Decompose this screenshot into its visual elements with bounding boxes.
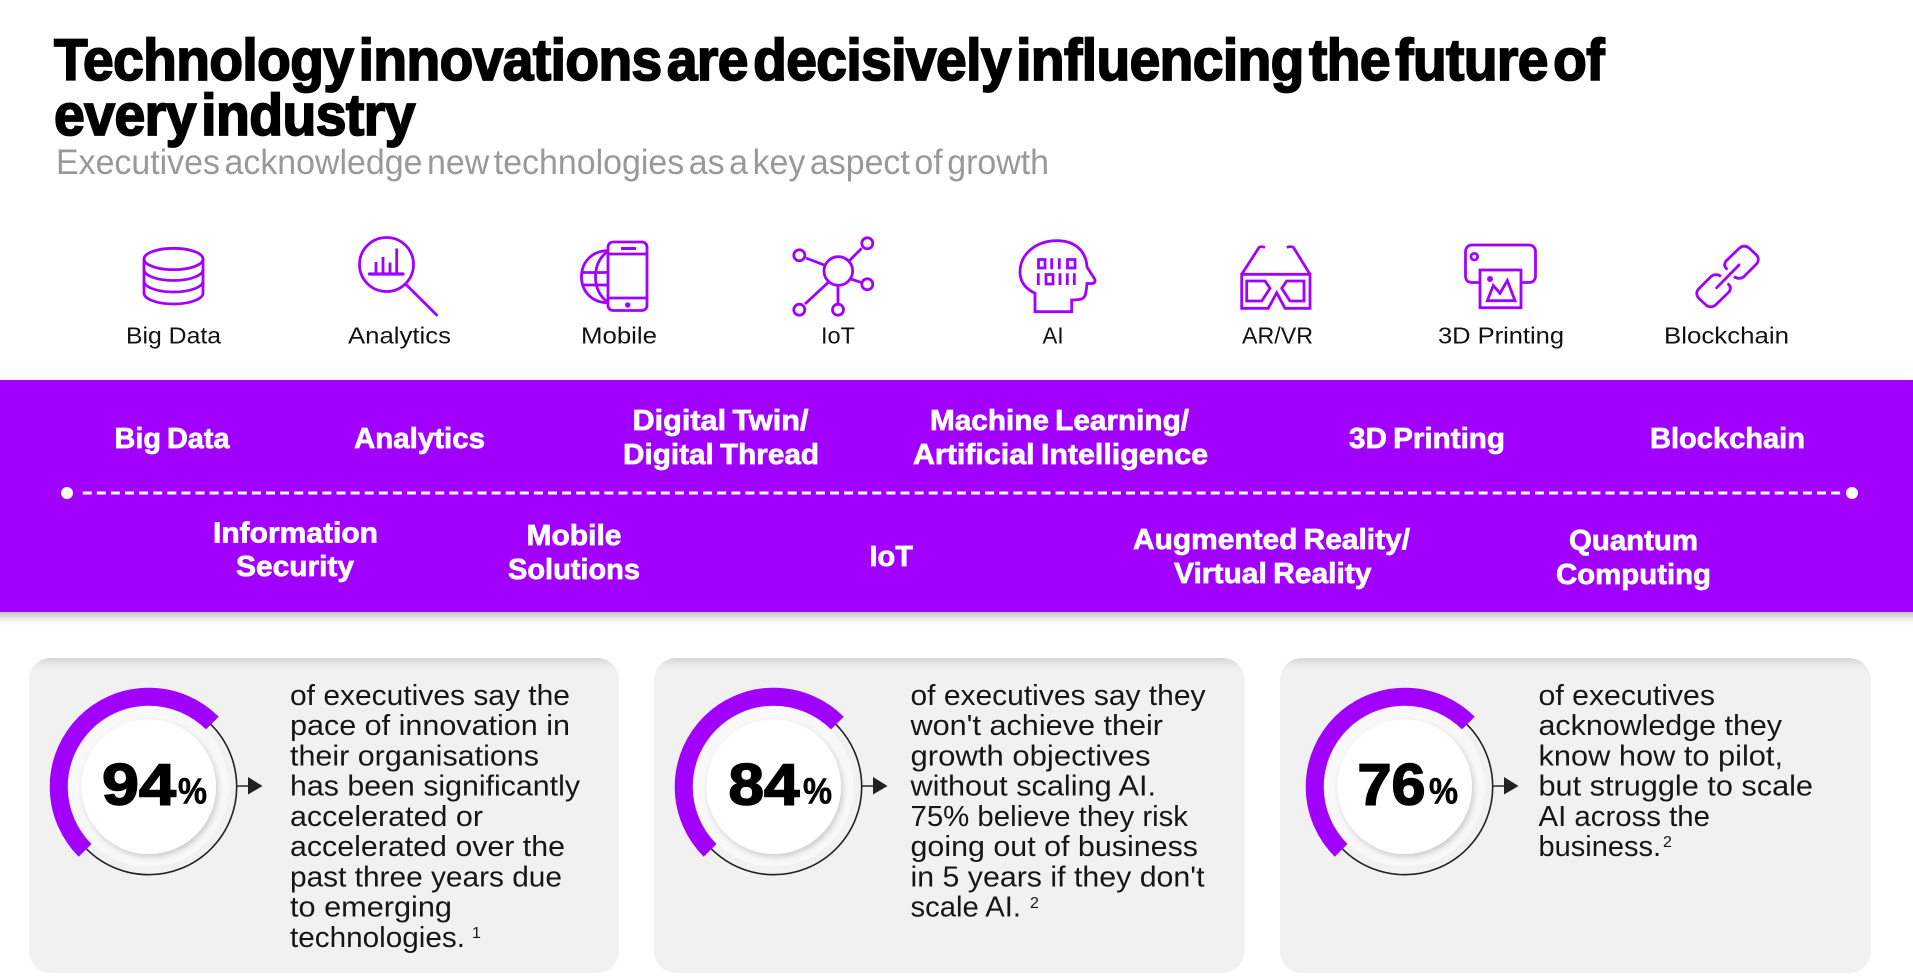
text block 76% (1538, 680, 1813, 863)
band label: Quantum Computing: Computing (1556, 559, 1711, 591)
icon: 3D printer (1466, 245, 1536, 308)
text block 84%: going out of business (910, 831, 1198, 863)
donut chart 76% (1315, 697, 1493, 875)
title: every industry (54, 83, 415, 148)
icon: AR/VR glasses (1242, 247, 1310, 308)
text block 84%: in 5 years if they don't (910, 861, 1204, 893)
text block 94%: pace of innovation in (290, 710, 570, 742)
text block 84%: without scaling AI. (909, 771, 1156, 803)
band label: Information Security: Information (213, 517, 378, 549)
band label: Machine Learning / Artificial Intelligence: Artificial Intelligence (913, 439, 1208, 471)
text block 76%: acknowledge they (1538, 710, 1783, 742)
band label: Machine Learning / Artificial Intelligence: Machine Learning/ (930, 405, 1189, 437)
text block 84%: of executives say they (910, 680, 1206, 712)
band label: Digital Twin / Digital Thread: Digital Twin/ (632, 405, 808, 437)
text block 94%: past three years due (290, 861, 562, 893)
label: IoT: IoT (821, 322, 855, 348)
band label: Augmented Reality / Virtual Reality: Virtual Reality (1174, 558, 1372, 590)
label: Blockchain: Blockchain (1664, 322, 1789, 348)
text block 76%: 2 (1663, 834, 1672, 851)
text block 84%: growth objectives (910, 740, 1150, 772)
stat number 76%: % (1429, 770, 1458, 812)
text block 94%: technologies. (290, 922, 465, 954)
band label: Digital Twin / Digital Thread (623, 405, 819, 471)
text block 94%: accelerated over the (290, 831, 565, 863)
band label: Information Security: Security (236, 551, 354, 583)
donut chart 94% (59, 697, 237, 875)
text block 76%: of executives (1538, 680, 1715, 712)
icon: IoT network (794, 238, 873, 315)
stat number 84% (728, 752, 832, 818)
text block 94%: their organisations (290, 740, 539, 772)
text block 84%: scale AI. (910, 892, 1021, 924)
panel: stat card 84% (654, 658, 1244, 973)
icon: AI head (1020, 241, 1095, 312)
arrow (237, 777, 262, 794)
band label: Analytics: Analytics (354, 423, 485, 455)
subtitle: Executives acknowledge new technologies as a key aspect of growth (56, 143, 1049, 182)
stat number 84%: % (803, 770, 832, 812)
text block 94%: has been significantly (290, 771, 581, 803)
title: Technology innovations are decisively influencing the future of (54, 28, 1605, 93)
text block 84%: 75% believe they risk (910, 801, 1189, 833)
stat number 84%: 84 (728, 752, 800, 818)
icon: analytics magnifier (360, 238, 437, 315)
timeline dashed line (61, 487, 1858, 499)
stat number 94%: % (178, 770, 207, 812)
label: Big Data: Big Data (126, 322, 222, 348)
text block 94%: accelerated or (290, 801, 483, 833)
band label: Mobile Solutions (508, 520, 640, 586)
band label: Information Security (213, 517, 378, 583)
icon: mobile and globe (582, 242, 647, 310)
text block 76%: AI across the (1538, 801, 1710, 833)
text block 76%: know how to pilot, (1538, 740, 1783, 772)
band label: Augmented Reality / Virtual Reality (1133, 524, 1410, 590)
band label: Mobile Solutions: Solutions (508, 554, 640, 586)
band label: Machine Learning / Artificial Intelligence (913, 405, 1208, 471)
stat number 76%: 76 (1358, 752, 1426, 818)
label: 3D Printing: 3D Printing (1438, 322, 1564, 348)
label: AI: AI (1042, 322, 1064, 348)
panel: stat card 94% (29, 658, 619, 973)
panel: stat card 76% (1280, 658, 1871, 973)
band label: Quantum Computing: Quantum (1569, 525, 1698, 557)
label: Analytics: Analytics (348, 322, 451, 348)
label: Mobile: Mobile (581, 322, 657, 348)
band label: Blockchain: Blockchain (1650, 423, 1805, 455)
text block 94%: of executives say the (290, 680, 570, 712)
donut chart 84% (684, 697, 862, 875)
band label: IoT: IoT (870, 541, 913, 573)
icon: big data database (144, 248, 203, 304)
stat number 94% (102, 752, 207, 818)
text block 76%: but struggle to scale (1538, 771, 1813, 803)
band label: Digital Twin / Digital Thread: Digital Thread (623, 439, 819, 471)
title (54, 28, 1605, 148)
band label: 3D Printing: 3D Printing (1349, 423, 1505, 455)
text block 84%: 2 (1030, 895, 1039, 912)
icon row (126, 238, 1789, 348)
text block 76%: business. (1538, 831, 1661, 863)
text block 94%: 1 (472, 925, 481, 942)
band label: Mobile Solutions: Mobile (526, 520, 622, 552)
text block 94% (290, 680, 581, 954)
label: AR/VR: AR/VR (1242, 322, 1313, 348)
arrow (1493, 777, 1518, 794)
band label: Augmented Reality / Virtual Reality: Augmented Reality/ (1133, 524, 1410, 556)
text block 84% (909, 680, 1206, 924)
text block 84%: won't achieve their (909, 710, 1163, 742)
stat number 76% (1358, 752, 1458, 818)
stat number 94%: 94 (102, 752, 176, 818)
panel: purple technology band (0, 380, 1913, 623)
arrow (862, 777, 888, 794)
band label: Quantum Computing (1556, 525, 1711, 591)
icon: blockchain link (1697, 246, 1758, 307)
band label: Big Data: Big Data (114, 423, 230, 455)
text block 94%: to emerging (290, 892, 452, 924)
